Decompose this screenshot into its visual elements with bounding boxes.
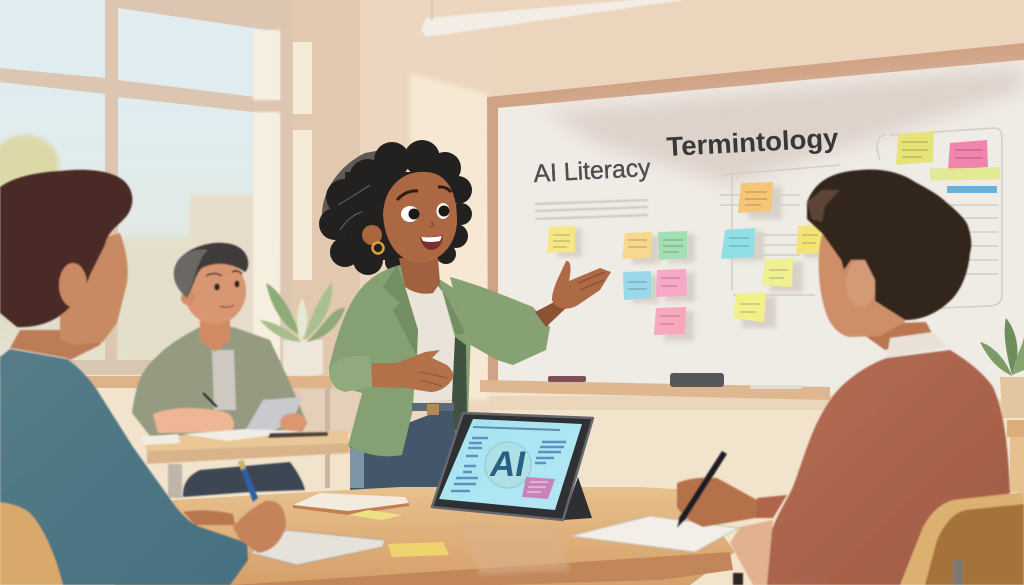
whiteboard [480,43,1024,400]
tablet text bars [451,438,566,491]
left student face [60,233,128,345]
window shelf [86,376,332,388]
left notebook [250,530,385,565]
window panes [0,0,280,365]
tablet [432,413,593,520]
teacher trousers [350,405,455,490]
heading: Termintology: Termintology [666,123,839,162]
right student hair [807,170,971,320]
yellow sticky on table [348,510,402,520]
left student [0,170,385,585]
teacher belt [412,403,454,411]
left student hair [0,170,132,327]
teacher [319,140,611,490]
eyes [401,206,419,222]
teacher neck [399,258,440,294]
right student hand and pen [677,451,757,528]
teacher lapels [383,265,418,357]
main table [115,487,735,585]
right plant [980,318,1024,418]
right chair [900,492,1024,585]
heading: AI Literacy: AI Literacy [533,154,652,188]
sticky notes [547,131,1000,341]
board diagram outlines [720,128,1002,308]
teacher jacket body [329,265,472,456]
left student ear [59,263,87,307]
teacher head [362,172,457,263]
right student face [819,235,905,337]
yellow sticky on table front [388,542,449,557]
right student sweater [766,350,1010,585]
board text lines [535,200,648,219]
teacher raised hand [535,261,611,327]
tablet AI label: AI [489,445,526,484]
teacher hair [319,140,472,275]
board ledge [480,373,830,400]
window [0,0,292,375]
sticky note text lines [553,142,983,324]
right student ear [846,259,876,307]
back student jacket [132,327,307,436]
teacher near sleeve cuff [329,356,372,392]
shelf support [325,388,330,488]
ceiling lamp [421,0,725,37]
right student [570,170,1024,585]
back desk [140,429,350,498]
right student cuff [755,495,787,518]
left student collar [8,348,71,362]
teacher near hand [372,350,453,392]
left chair [0,502,63,585]
right student forearm [730,520,773,585]
left student sweater [0,349,248,585]
left student pen [238,460,258,502]
back student pen [203,393,217,407]
tablet pink card [522,477,555,499]
back student head [200,318,230,352]
teacher inner jacket shadow [452,337,467,438]
left student hand [233,501,286,553]
right notebook [570,516,738,552]
back student legs [183,462,305,497]
right side desk [1007,420,1024,492]
back student tablet [245,397,303,431]
tablet stand [563,477,592,520]
left student neck [10,300,120,360]
notebook on table [293,493,409,515]
back student forearm [153,408,234,433]
potted plant on shelf [260,282,345,376]
teacher raised arm [450,277,550,365]
left student second hand [183,510,235,525]
teacher shirt [405,283,455,405]
student in back [132,243,307,497]
back student tee [212,350,236,410]
right student neck and collar [850,322,933,350]
tablet screen [439,419,582,510]
